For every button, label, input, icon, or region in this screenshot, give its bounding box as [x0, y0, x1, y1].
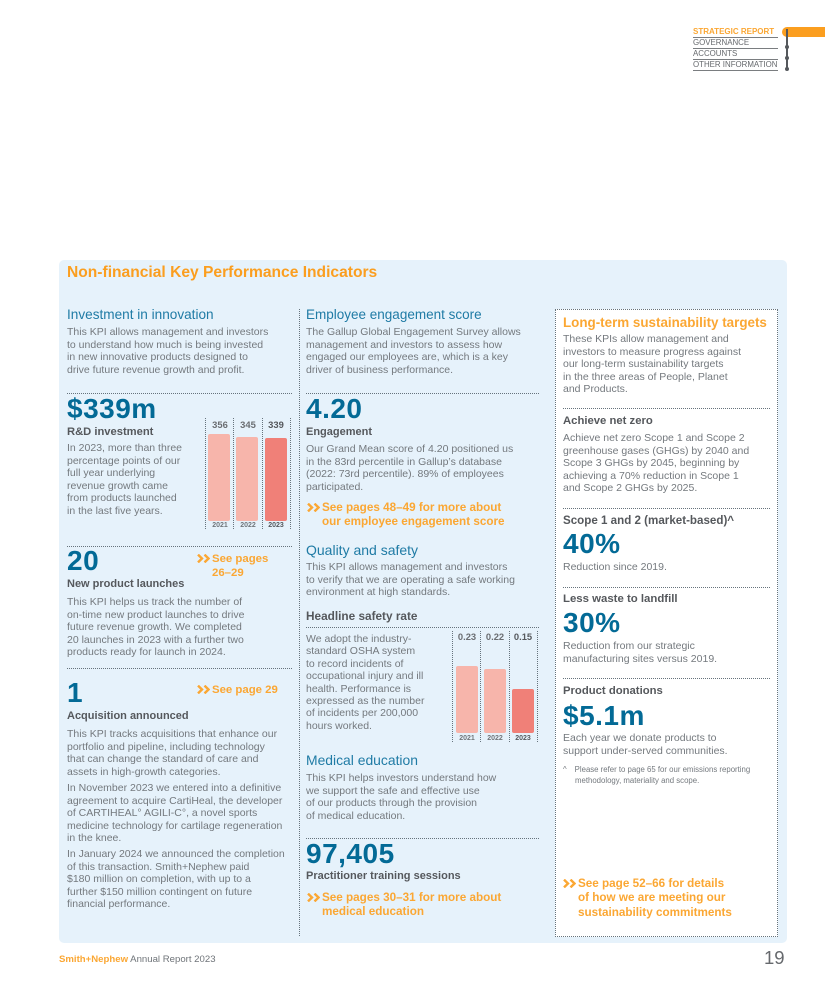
- text: R&D description: full year underlying: [67, 467, 155, 479]
- heading: long-term sustainability targets: Long-term sustainability targets: [563, 315, 767, 330]
- text: acquisition description: portfolio and pipeline, including technology: [67, 741, 265, 753]
- text: acquisition description: [67, 728, 277, 778]
- bar chart: R&D investment: 339: [268, 419, 284, 430]
- text: innovation intro: This KPI allows management and investors: [67, 326, 268, 338]
- column divider: [299, 309, 300, 936]
- section navigation: GOVERNANCE: [693, 38, 749, 47]
- label: scope 1 and 2: Scope 1 and 2 (market-based)^: [563, 514, 734, 527]
- section navigation: ACCOUNTS: [693, 49, 737, 58]
- number: 4.20: 4.20: [306, 393, 362, 424]
- footnote: ^ Please refer to page 65 for our emissions reporting: [563, 765, 750, 774]
- number: 40%: 40%: [563, 528, 621, 559]
- sustainability panel: [555, 309, 778, 937]
- text: medical intro: of medical education.: [306, 810, 405, 822]
- link: pages 52-66: sustainability commitments: [578, 906, 732, 919]
- text: engagement description: participated.: [306, 481, 363, 493]
- text: completion: $180 million on completion, with up to a: [67, 873, 251, 885]
- bar chart: safety rate: 2022: [487, 735, 503, 742]
- bar chart: R&D investment: 345: [240, 419, 256, 430]
- text: completion: In January 2024 we announced the completion: [67, 848, 285, 860]
- text: net zero description: and Scope 2 GHGs by 2025.: [563, 482, 697, 494]
- text: completion: financial performance.: [67, 898, 170, 910]
- text: sustainability intro: our long-term sustainability targets: [563, 358, 724, 370]
- label: headline safety rate: Headline safety rate: [306, 609, 417, 623]
- footnote: methodology, materiality and scope.: [575, 776, 699, 785]
- link: see pages 26-29: [197, 553, 268, 579]
- text: launches description: on-time new product launches to drive: [67, 609, 244, 621]
- section navigation: [693, 27, 825, 71]
- text: completion: [67, 848, 285, 910]
- text: sustainability intro: [563, 333, 741, 395]
- text: acquisition description: assets in high-growth categories.: [67, 766, 220, 778]
- bar chart: R&D investment: 2023: [268, 522, 284, 529]
- text: sustainability intro: investors to measure progress against: [563, 346, 741, 358]
- text: R&D description: in the last five years.: [67, 505, 163, 517]
- label: engagement: Engagement: [306, 426, 372, 438]
- label: achieve net zero: Achieve net zero: [563, 415, 653, 427]
- bar chart: R&D investment: 2022: [240, 522, 256, 529]
- bar chart: R&D investment: 2021: [212, 522, 228, 529]
- text: R&D description: In 2023, more than three: [67, 442, 182, 454]
- bar chart: R&D investment: 356: [212, 419, 228, 430]
- text: net zero description: achieving a 70% reduction in Scope 1: [563, 470, 739, 482]
- text: medical intro: This KPI helps investors understand how: [306, 772, 496, 784]
- bar chart: safety rate: 2023: [515, 735, 531, 742]
- text: innovation intro: in new innovative products designed to: [67, 351, 248, 363]
- label: acquisition announced: Acquisition announced: [67, 710, 189, 722]
- text: launches description: 20 launches in 2023 with a further two: [67, 634, 244, 646]
- text: donations description: Each year we donate products to: [563, 732, 717, 744]
- text: completion: of this transaction. Smith+Nephew paid: [67, 861, 249, 873]
- text: net zero description: greenhouse gases (GHGs) by 2040 and: [563, 445, 749, 457]
- heading: investment in innovation: Investment in innovation: [67, 307, 214, 322]
- text: acquisition description: This KPI tracks acquisitions that enhance our: [67, 728, 277, 740]
- heading: quality and safety: Quality and safety: [306, 542, 418, 558]
- text: R&D description: [67, 442, 182, 517]
- link: see pages 26-29: 26–29: [212, 567, 244, 579]
- link: pages 30-31: [307, 891, 502, 918]
- text: engagement intro: engaged our employees are, which is a key: [306, 351, 508, 363]
- text: waste reduction: manufacturing sites versus 2019.: [563, 653, 717, 665]
- text: safety description: standard OSHA system: [306, 645, 415, 657]
- panel title: Non-financial Key Performance Indicators: [67, 264, 377, 281]
- text: launches description: This KPI helps us track the number of: [67, 596, 242, 608]
- label: R&D investment: R&D investment: [67, 426, 153, 438]
- text: quality intro: This KPI allows management and investors: [306, 561, 507, 573]
- text: engagement intro: driver of business performance.: [306, 364, 453, 376]
- text: engagement description: (2022: 73rd percentile). 89% of employees: [306, 468, 504, 480]
- text: R&D description: percentage points of our: [67, 455, 180, 467]
- heading: employee engagement score: Employee engagement score: [306, 307, 482, 322]
- link: pages 30-31: medical education: [322, 905, 424, 918]
- text: net zero description: Achieve net zero Scope 1 and Scope 2: [563, 432, 745, 444]
- number: 5.1m: $5.1m: [563, 700, 645, 731]
- text: waste reduction: [563, 640, 717, 665]
- text: waste reduction: Reduction from our strategic: [563, 640, 695, 652]
- number: 97,405: 97,405: [306, 838, 395, 869]
- text: innovation intro: to understand how much is being invested: [67, 339, 263, 351]
- bar chart: R&D investment: [205, 418, 291, 529]
- bar chart: safety rate: [452, 631, 538, 742]
- link: see page 29: See page 29: [212, 684, 278, 696]
- text: CartiHeal agreement: medicine technology for cartilage regeneration: [67, 820, 282, 832]
- text: safety description: occupational injury and ill: [306, 670, 423, 682]
- text: engagement description: in the 83rd percentile in Gallup’s database: [306, 456, 502, 468]
- label: less waste to landfill: Less waste to landfill: [563, 593, 678, 605]
- text: launches description: [67, 596, 244, 658]
- link: pages 52-66: [563, 877, 732, 919]
- text: medical intro: we support the safe and effective use: [306, 785, 480, 797]
- label: new product launches: New product launches: [67, 578, 184, 590]
- text: medical intro: of our products through the provision: [306, 797, 477, 809]
- text: sustainability intro: These KPIs allow management and: [563, 333, 729, 345]
- text: engagement intro: [306, 326, 521, 376]
- link: pages 48-49: [307, 501, 505, 528]
- text: acquisition description: that can change the standard of care and: [67, 753, 258, 765]
- text: safety description: expressed as the number: [306, 695, 424, 707]
- label: product donations: Product donations: [563, 685, 663, 697]
- text: quality intro: to verify that we are operating a safe working: [306, 574, 515, 586]
- text: innovation intro: drive future revenue growth and profit.: [67, 364, 244, 376]
- text: CartiHeal agreement: [67, 782, 282, 844]
- heading: medical education: Medical education: [306, 752, 418, 768]
- number: 30%: 30%: [563, 607, 621, 638]
- footer: page number: 19: [764, 947, 785, 968]
- text: reduction since 2019: Reduction since 2019.: [563, 561, 667, 573]
- section navigation: OTHER INFORMATION: [693, 60, 777, 69]
- bar chart: safety rate: 0.22: [486, 631, 504, 642]
- link: pages 52-66: of how we are meeting our: [578, 891, 725, 904]
- text: CartiHeal agreement: in the knee.: [67, 832, 121, 844]
- text: net zero description: [563, 432, 749, 494]
- link: pages 48-49: our employee engagement score: [322, 515, 505, 528]
- number: 20: 20: [67, 545, 99, 576]
- text: engagement description: [306, 443, 513, 493]
- label: practitioner training sessions: Practitioner training sessions: [306, 870, 461, 882]
- text: quality intro: environment at high standards.: [306, 586, 450, 598]
- footnote: [563, 765, 750, 785]
- text: CartiHeal agreement: In November 2023 we entered into a definitive: [67, 782, 281, 794]
- text: safety description: We adopt the industry-: [306, 633, 411, 645]
- main KPI panel: [59, 260, 787, 943]
- text: safety description: to record incidents of: [306, 658, 403, 670]
- text: safety description: [306, 633, 424, 732]
- link: pages 48-49: See pages 48–49 for more about: [322, 501, 501, 514]
- text: launches description: products ready for launch in 2024.: [67, 646, 226, 658]
- section navigation: STRATEGIC REPORT: [693, 27, 774, 36]
- text: safety description: health. Performance is: [306, 683, 411, 695]
- text: sustainability intro: in the three areas of People, Planet: [563, 371, 728, 383]
- bar chart: safety rate: 0.15: [514, 631, 532, 642]
- text: sustainability intro: and Products.: [563, 383, 628, 395]
- link: see pages 26-29: See pages: [212, 553, 268, 565]
- text: engagement intro: management and investors to assess how: [306, 339, 502, 351]
- number: 1: 1: [67, 677, 83, 708]
- text: safety description: of incidents per 200,000: [306, 707, 418, 719]
- text: net zero description: Scope 3 GHGs by 2045, beginning by: [563, 457, 739, 469]
- text: safety description: hours worked.: [306, 720, 372, 732]
- text: donations description: support under-served communities.: [563, 745, 728, 757]
- text: medical intro: [306, 772, 496, 822]
- text: quality intro: [306, 561, 515, 598]
- text: R&D description: revenue growth came: [67, 480, 168, 492]
- text: CartiHeal agreement: of CARTIHEAL° AGILI-C°, a novel sports: [67, 807, 257, 819]
- link: pages 30-31: See pages 30–31 for more about: [322, 891, 501, 904]
- text: innovation intro: [67, 326, 268, 376]
- text: CartiHeal agreement: agreement to acquire CartiHeal, the developer: [67, 795, 282, 807]
- number: 339m: $339m: [67, 393, 157, 424]
- text: launches description: future revenue growth. We completed: [67, 621, 242, 633]
- bar chart: safety rate: 2021: [459, 735, 475, 742]
- footer: report name: Smith+Nephew Annual Report 2023: [59, 954, 216, 965]
- text: engagement description: Our Grand Mean score of 4.20 positioned us: [306, 443, 513, 455]
- text: R&D description: from products launched: [67, 492, 177, 504]
- text: donations description: [563, 732, 728, 757]
- bar chart: safety rate: 0.23: [458, 631, 476, 642]
- text: completion: further $150 million contingent on future: [67, 886, 252, 898]
- link: pages 52-66: See page 52–66 for details: [578, 877, 724, 890]
- text: engagement intro: The Gallup Global Engagement Survey allows: [306, 326, 521, 338]
